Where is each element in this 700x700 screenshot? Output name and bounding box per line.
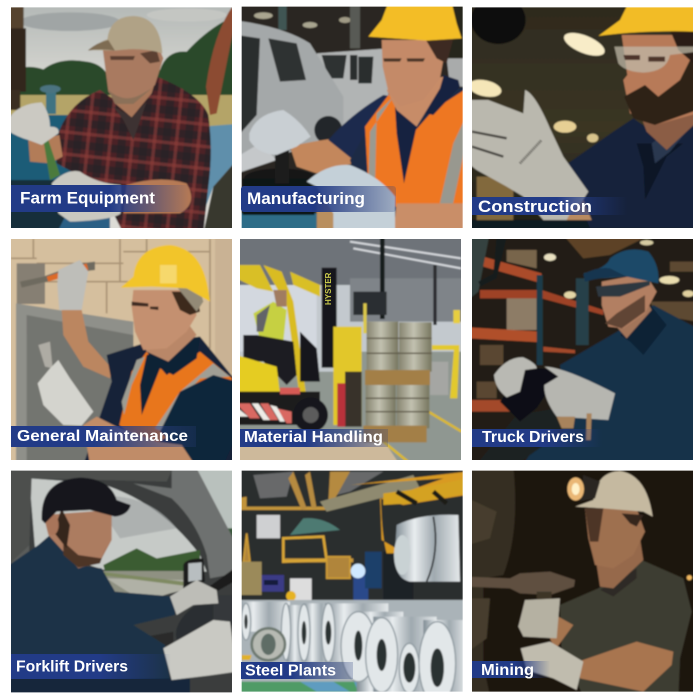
label band: Construction (472, 197, 627, 215)
panel: Steel Plants (237, 467, 467, 700)
lamp (580, 475, 600, 501)
glove (468, 90, 588, 220)
wrench (20, 262, 95, 288)
label text: Steel Plants: Steel Plants (245, 662, 336, 680)
gloves (518, 598, 560, 638)
shirt (523, 305, 697, 464)
hanging coil (395, 515, 460, 582)
label text: Material Handling: Material Handling (244, 429, 383, 446)
panel: Material Handling (236, 235, 466, 465)
panel: Mining (468, 467, 697, 696)
photo: steel coils in mill (237, 467, 467, 700)
photo: driver in truck cab (11, 470, 232, 692)
coils (237, 600, 467, 682)
label text: General Maintenance: General Maintenance (17, 428, 188, 445)
panel: Construction (467, 0, 697, 233)
label text: Truck Drivers: Truck Drivers (482, 429, 584, 446)
photo: bearded worker inspecting glove (467, 0, 697, 233)
label band: Steel Plants (241, 662, 353, 679)
drill (468, 572, 575, 595)
door panel (16, 303, 133, 465)
photo: worker in vest at factory (237, 3, 467, 233)
label text: Farm Equipment: Farm Equipment (20, 188, 155, 208)
glasses (614, 47, 697, 73)
floor (236, 425, 466, 465)
forklift (263, 265, 307, 400)
label band: Manufacturing (241, 186, 396, 212)
floor (237, 665, 467, 697)
shelving (507, 250, 537, 268)
photo: driver in blue cap at forklift wheel (468, 235, 697, 464)
label text: Mining: Mining (481, 662, 534, 679)
steering (481, 410, 562, 460)
barrier (432, 345, 459, 398)
label band: Material Handling (240, 429, 388, 447)
label text: Manufacturing: Manufacturing (247, 190, 365, 208)
shirt (563, 118, 697, 228)
label band: Truck Drivers (472, 429, 602, 447)
photo: farmer on tractor (7, 3, 237, 233)
body (83, 337, 237, 465)
shirt (56, 76, 211, 233)
panel: Manufacturing (237, 3, 467, 233)
forklift brand lettering: HYSTER (324, 272, 333, 305)
label text: Forklift Drivers: Forklift Drivers (16, 658, 128, 676)
label band: General Maintenance (11, 426, 196, 447)
kegs (366, 322, 432, 428)
hard hat (598, 3, 697, 36)
driver (253, 302, 287, 342)
label text: Construction: Construction (478, 198, 592, 216)
lower glove (38, 360, 93, 426)
photo: miner drilling underground (468, 467, 697, 696)
label band: Farm Equipment (11, 185, 191, 212)
crane hook (350, 472, 467, 553)
label band: Forklift Drivers (11, 654, 171, 679)
panel: Truck Drivers (468, 235, 697, 464)
label band: Mining (472, 661, 550, 678)
photo: forklift and kegs in warehouse (236, 235, 466, 465)
arm up (62, 310, 112, 378)
shirt (560, 560, 692, 696)
panel: General Maintenance (7, 235, 237, 465)
jacket (11, 535, 175, 678)
panel: Forklift Drivers (11, 470, 232, 692)
vest (365, 88, 467, 210)
photo: worker with wrenches at wall panel (7, 235, 237, 465)
panel: Farm Equipment (7, 3, 237, 233)
arm (550, 617, 573, 650)
